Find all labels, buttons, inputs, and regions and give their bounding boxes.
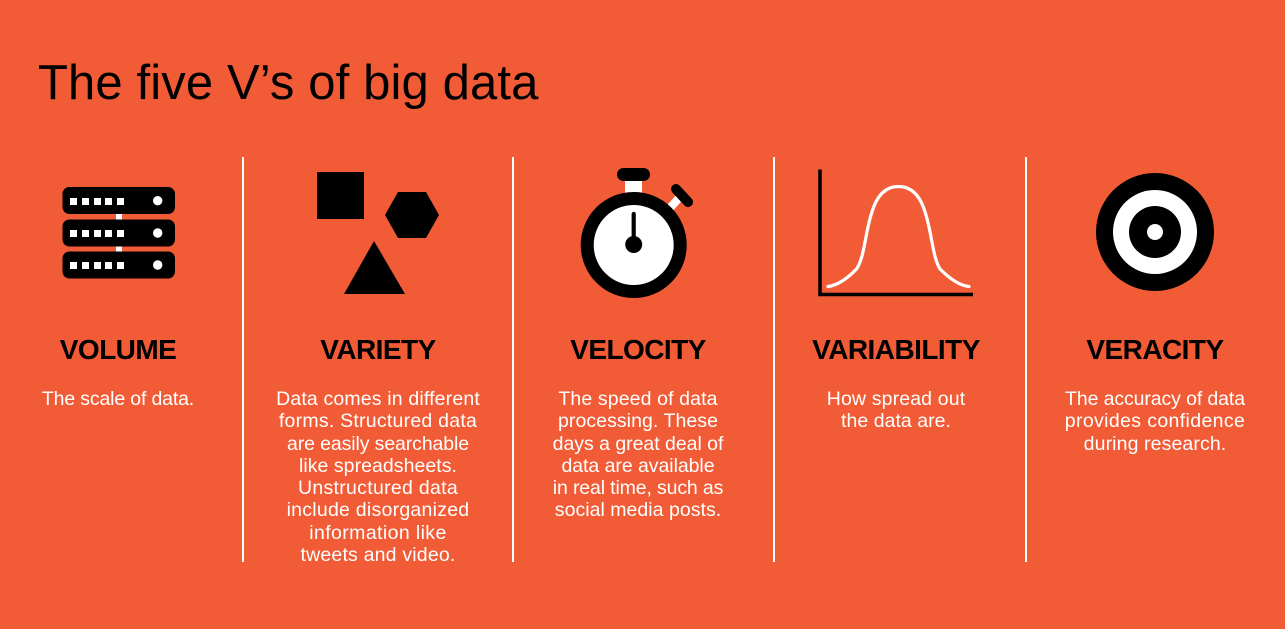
text: variety: like spreadsheets. — [299, 455, 457, 477]
text: variety: tweets and video. — [300, 544, 456, 566]
text: variability — [827, 388, 966, 432]
text: veracity — [1065, 388, 1246, 455]
text: velocity — [553, 388, 724, 521]
text: veracity: The accuracy of data — [1065, 388, 1245, 410]
text: variability: the data are. — [841, 410, 951, 432]
text: veracity: during research. — [1084, 433, 1226, 455]
text: veracity: provides confidence — [1065, 410, 1245, 432]
text: variety: include disorganized — [287, 499, 469, 521]
text: variety: Data comes in different — [276, 388, 480, 410]
text: velocity: social media posts. — [555, 499, 721, 521]
icon: target — [1096, 173, 1214, 291]
heading: velocity: VELOCITY — [570, 334, 706, 365]
text: variety: are easily searchable — [287, 433, 469, 455]
text: variability: How spread out — [827, 388, 965, 410]
text: velocity: data are available — [561, 455, 715, 477]
text: variety — [276, 388, 480, 566]
icon: bell curve chart — [818, 170, 973, 296]
text: variety: Unstructured data — [298, 477, 458, 499]
text: velocity: The speed of data — [558, 388, 718, 410]
text: volume: The scale of data. — [42, 388, 194, 410]
text: velocity: days a great deal of — [553, 433, 723, 455]
heading: variety: VARIETY — [320, 334, 436, 365]
text: velocity: in real time, such as — [553, 477, 723, 499]
icon: server stack — [62, 187, 175, 278]
heading: volume: VOLUME — [60, 334, 176, 365]
title: The five V’s of big data — [38, 56, 538, 110]
heading: veracity: VERACITY — [1086, 334, 1224, 365]
icon: shapes — [317, 172, 439, 294]
text: variety: forms. Structured data — [279, 410, 477, 432]
icon: stopwatch — [580, 168, 693, 298]
heading: variability: VARIABILITY — [812, 334, 980, 365]
text: variety: information like — [309, 522, 447, 544]
text: velocity: processing. These — [558, 410, 718, 432]
